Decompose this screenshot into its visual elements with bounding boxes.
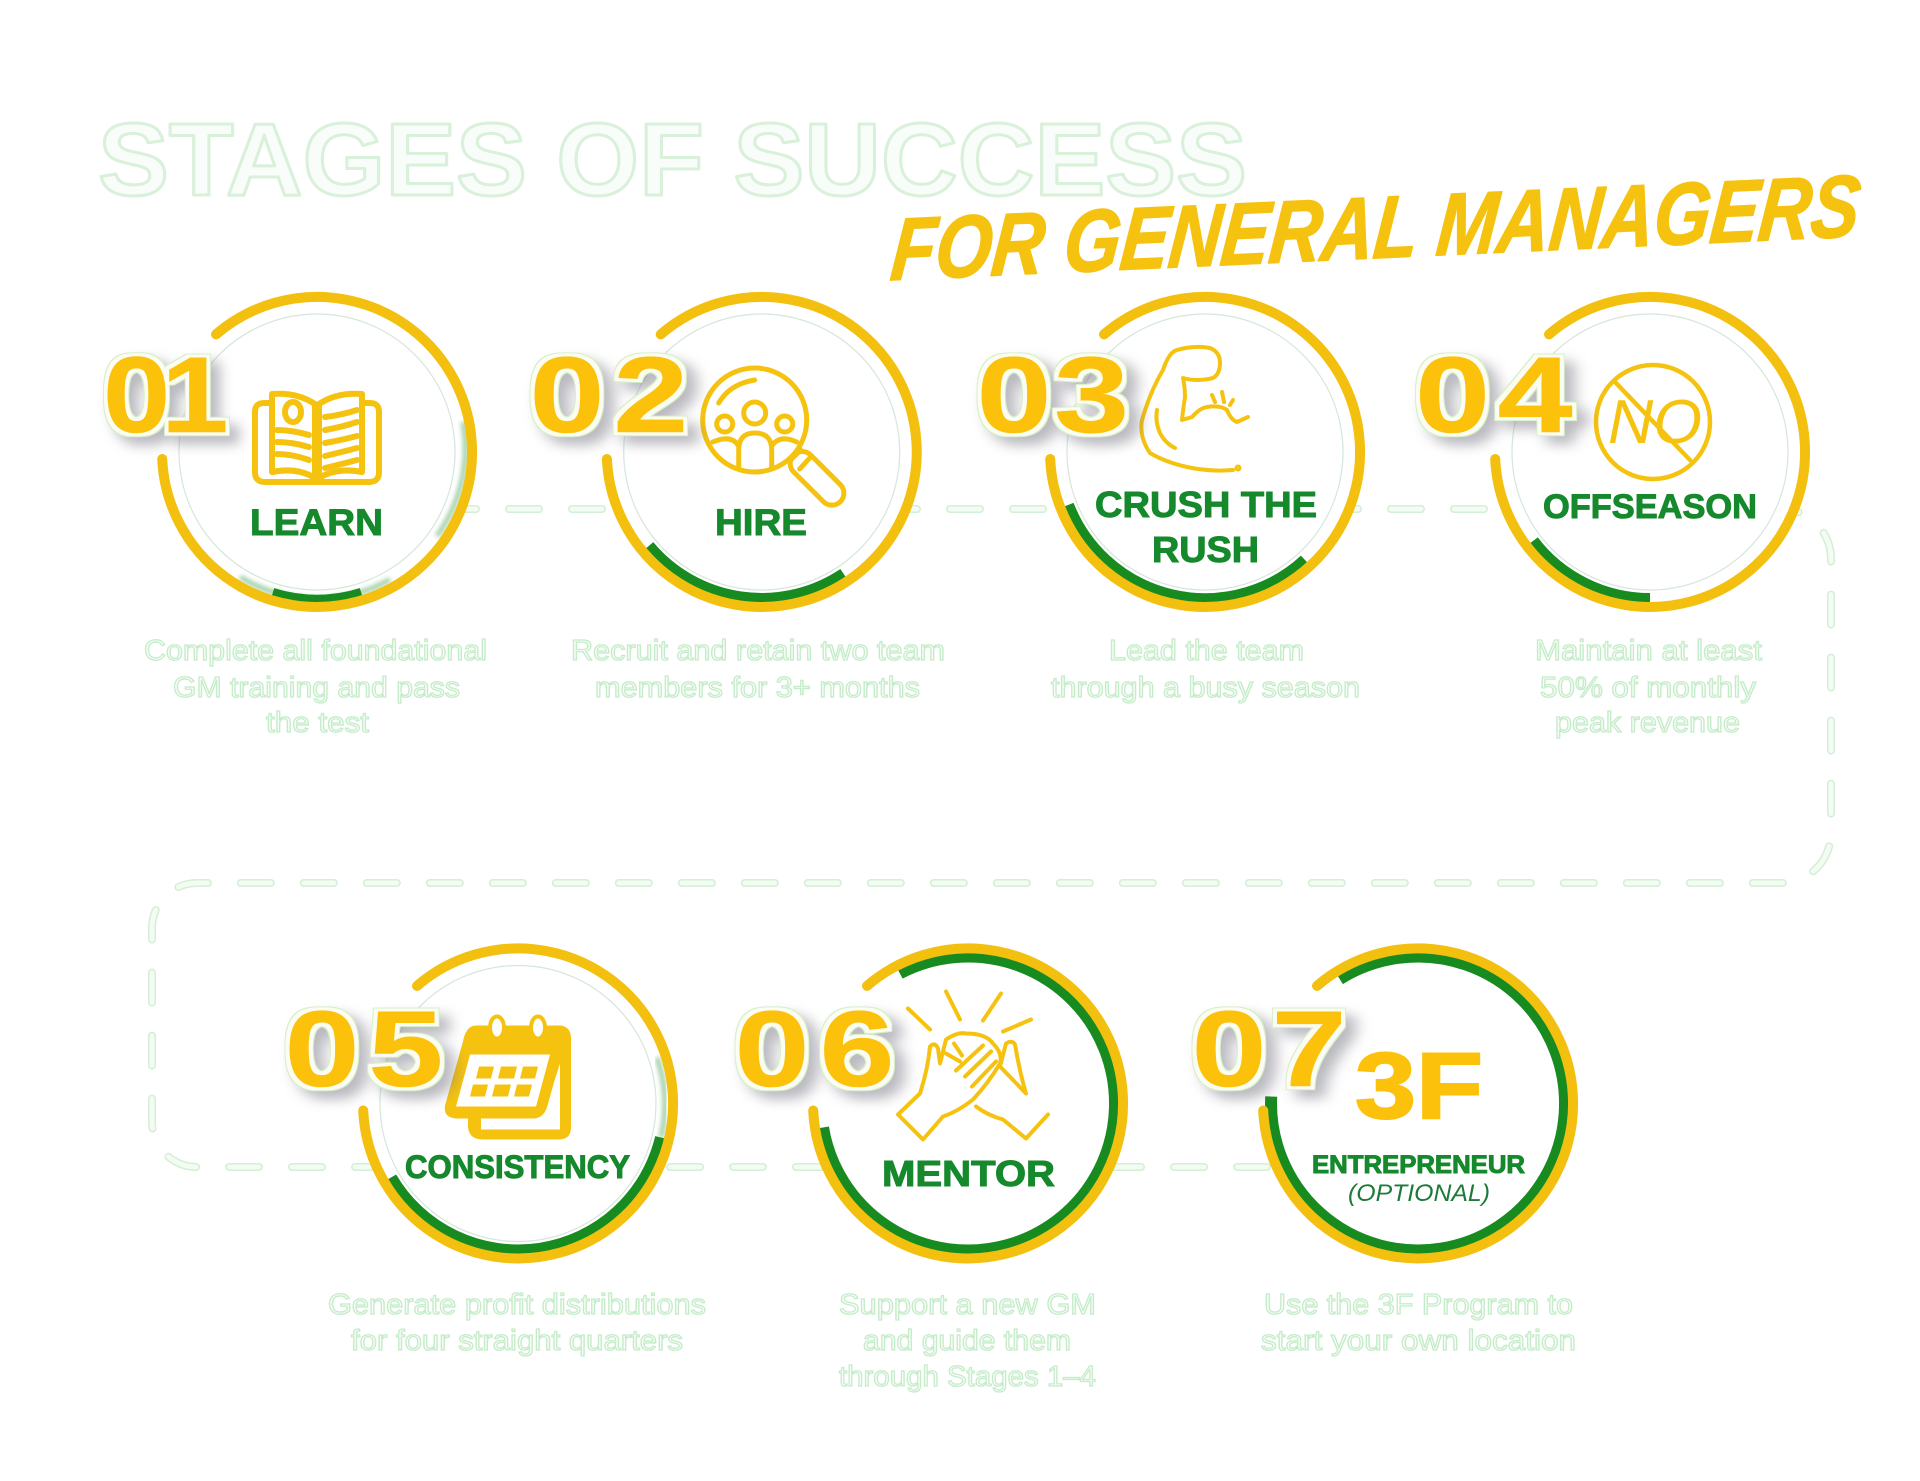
description 06: through Stages 1–4 — [839, 1361, 1096, 1393]
description 01: the test — [266, 707, 369, 739]
label: offseason: OFFSEASON — [1543, 488, 1757, 526]
title: STAGES OF SUCCESS — [98, 102, 1247, 217]
description 04: 50% of monthly — [1540, 672, 1757, 704]
label: learn: LEARN — [250, 502, 383, 543]
description 03: through a busy season — [1051, 672, 1360, 704]
label: entrepreneur: ENTREPRENEUR — [1312, 1151, 1525, 1179]
circle 07 — [1262, 948, 1574, 1260]
label: mentor: MENTOR — [882, 1153, 1055, 1194]
circle 01 — [161, 296, 473, 608]
circle 06 — [812, 948, 1124, 1260]
number 03: 03 — [976, 334, 1129, 455]
description 04: peak revenue — [1555, 707, 1740, 739]
description 06: and guide them — [863, 1325, 1071, 1357]
label: crush the rush: RUSH — [1152, 529, 1259, 570]
icon: high five hands — [898, 992, 1048, 1140]
icon: magnifier with people — [703, 368, 849, 510]
label: crush the rush: CRUSH THE — [1095, 484, 1317, 525]
icon: open book — [255, 394, 379, 482]
number 06: 06 — [734, 988, 895, 1109]
stage 05: consistency — [284, 948, 706, 1357]
number 05: 05 — [284, 988, 443, 1109]
stage 01: learn — [103, 296, 487, 739]
icon: flexed arm — [1141, 347, 1248, 471]
description 07: start your own location — [1261, 1325, 1576, 1357]
dashed connector path — [152, 509, 1831, 1167]
stage 04: offseason — [1415, 296, 1806, 739]
label: optional: (OPTIONAL) — [1348, 1180, 1490, 1207]
description 01: GM training and pass — [173, 672, 460, 704]
description 06: Support a new GM — [839, 1289, 1096, 1321]
description 05: Generate profit distributions — [328, 1289, 706, 1321]
description 01: Complete all foundational — [144, 635, 487, 667]
description 02: Recruit and retain two team — [571, 635, 945, 667]
circle 04 — [1494, 296, 1806, 608]
icon: 3F logo: 3F — [1355, 1033, 1483, 1138]
number 01: 01 — [103, 335, 229, 456]
stage 02: hire — [530, 296, 945, 704]
stage 03: crush the rush — [976, 296, 1361, 704]
description 04: Maintain at least — [1535, 635, 1762, 667]
stage 06: mentor — [734, 948, 1124, 1393]
description 07: Use the 3F Program to — [1264, 1289, 1573, 1321]
description 03: Lead the team — [1109, 635, 1304, 667]
circle 02 — [606, 296, 918, 608]
description 02: members for 3+ months — [595, 672, 920, 704]
stage 07: entrepreneur — [1192, 948, 1576, 1357]
label: hire: HIRE — [715, 502, 807, 543]
description 05: for four straight quarters — [351, 1325, 683, 1357]
icon: no sign — [1596, 365, 1710, 479]
circle 05 — [362, 948, 674, 1260]
label: consistency: CONSISTENCY — [405, 1149, 630, 1185]
icon: calendar — [445, 1016, 571, 1140]
number 07: 07 — [1192, 988, 1347, 1109]
icon: no sign: NO — [1608, 388, 1702, 457]
number 02: 02 — [530, 334, 688, 455]
circle 03 — [1049, 296, 1361, 608]
number 04: 04 — [1415, 334, 1573, 455]
